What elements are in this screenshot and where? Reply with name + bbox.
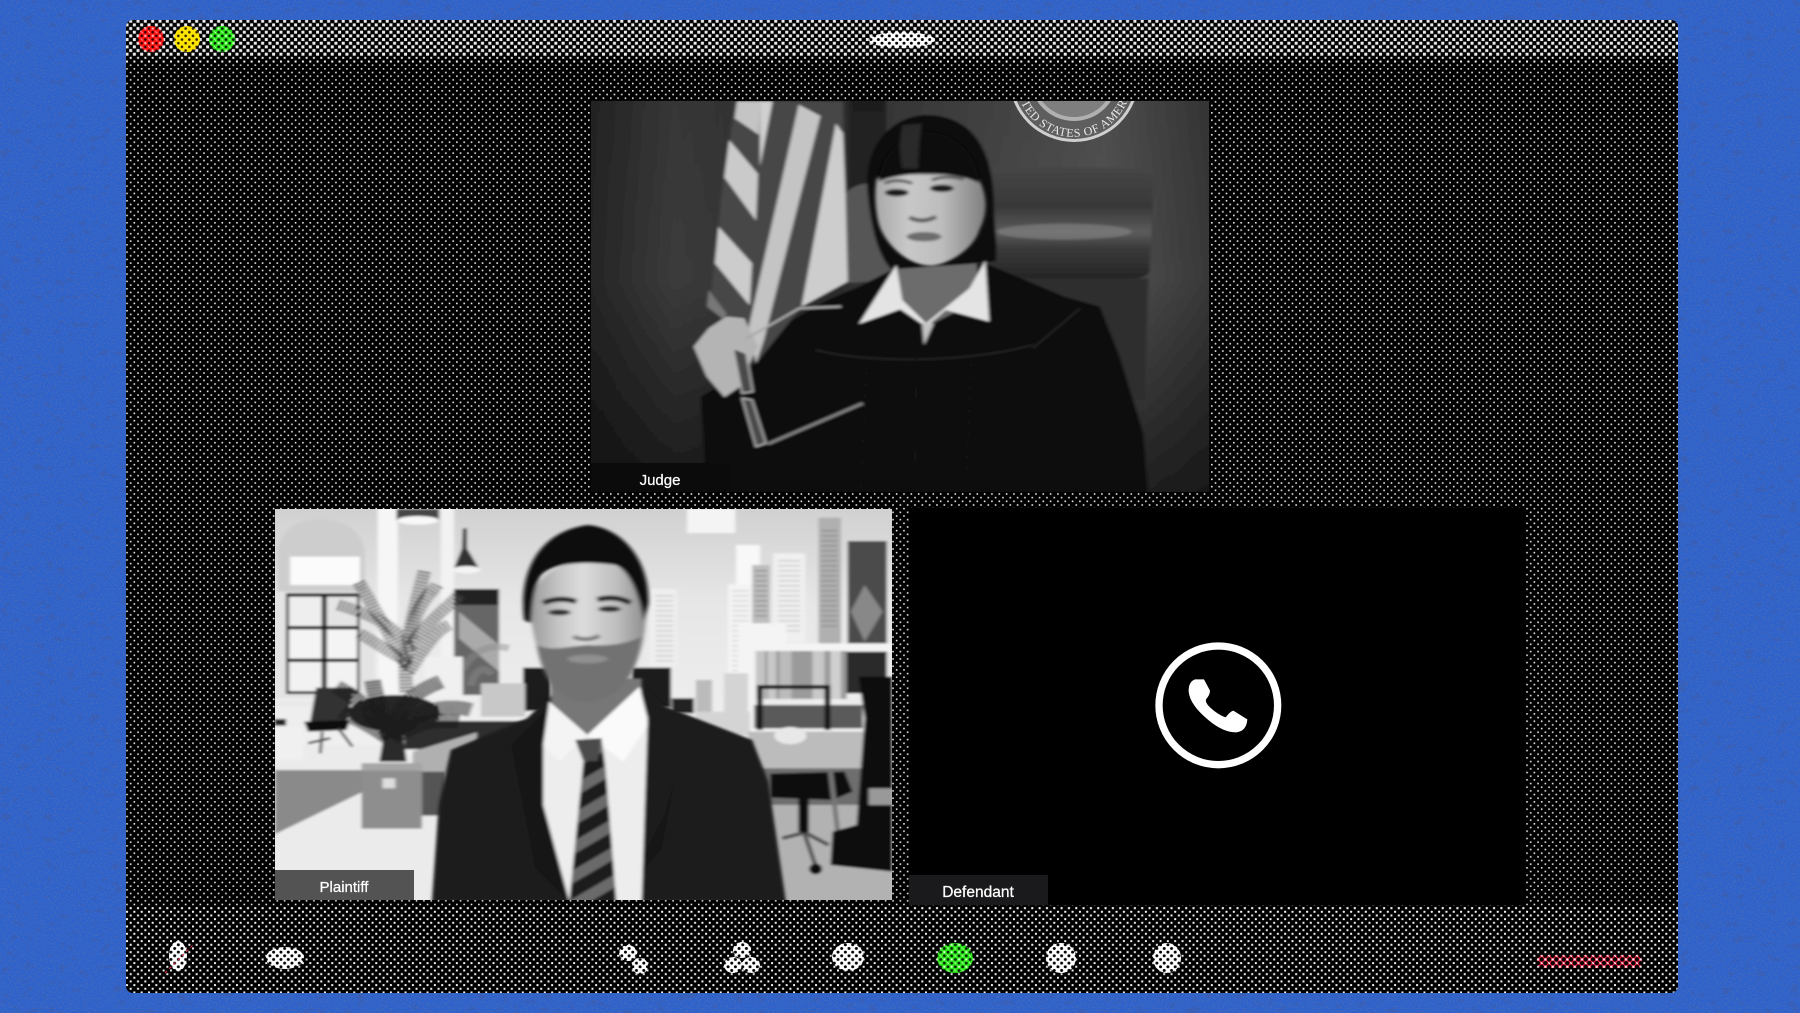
panel: plaintiff video <box>270 505 913 908</box>
planter <box>362 763 422 829</box>
lamps <box>394 509 441 522</box>
chair <box>987 167 1154 280</box>
seal <box>1014 101 1134 142</box>
desk right <box>747 730 868 770</box>
window control: green <box>209 26 235 52</box>
left desks and chairs <box>275 702 315 706</box>
right wall shutters <box>736 545 760 588</box>
toolbar: share screen button <box>937 943 973 973</box>
shelves with binders <box>738 623 786 643</box>
judge name label <box>591 463 707 492</box>
window title bar <box>126 20 1678 56</box>
right artwork <box>848 541 887 644</box>
flag <box>709 101 848 367</box>
toolbar: participants button <box>724 942 760 973</box>
left window <box>276 530 365 592</box>
window control: yellow <box>174 26 200 52</box>
bottom toolbar strip <box>126 906 1678 993</box>
hair back <box>867 115 997 269</box>
glasses <box>746 307 841 339</box>
plaintiff name label: Plaintiff <box>320 879 369 896</box>
panel: defendant video <box>909 508 1526 905</box>
seal: UNITED STATES OF AMERICA <box>1020 101 1128 137</box>
plaintiff name label <box>275 870 414 900</box>
office wall <box>270 505 913 778</box>
robe <box>701 263 1148 497</box>
office chair <box>770 772 853 800</box>
window title blob <box>869 32 935 48</box>
toolbar: reactions button <box>1153 943 1181 973</box>
collar <box>859 261 989 327</box>
toolbar: camera button <box>266 947 304 969</box>
plaintiff face <box>523 525 649 702</box>
title bar fade strip <box>126 56 1678 63</box>
dark cabinet <box>405 721 525 749</box>
man <box>432 525 786 902</box>
window control: red <box>138 26 164 52</box>
toolbar: microphone button <box>165 941 194 973</box>
desk left <box>413 732 477 772</box>
columns <box>378 505 398 702</box>
shelf unit <box>425 657 463 698</box>
halftone window body <box>126 62 1678 912</box>
defendant name label <box>909 875 1048 905</box>
rug <box>275 770 363 834</box>
panel: judge video <box>591 101 1209 492</box>
hand <box>694 317 758 397</box>
toolbar: chat button <box>832 943 864 971</box>
judge face <box>875 123 986 266</box>
sago palm <box>379 732 407 762</box>
defendant name label: Defendant <box>942 884 1014 901</box>
floor left <box>275 766 436 900</box>
small items <box>696 680 712 713</box>
toolbar: security button <box>619 945 648 974</box>
wall art <box>454 589 499 695</box>
icon: phone in circle <box>1159 646 1278 765</box>
neck <box>897 261 980 324</box>
toolbar: record button <box>1046 943 1076 973</box>
tall palm <box>338 570 459 692</box>
toolbar: end meeting button <box>1537 955 1642 968</box>
judge name label: Judge <box>640 472 680 489</box>
